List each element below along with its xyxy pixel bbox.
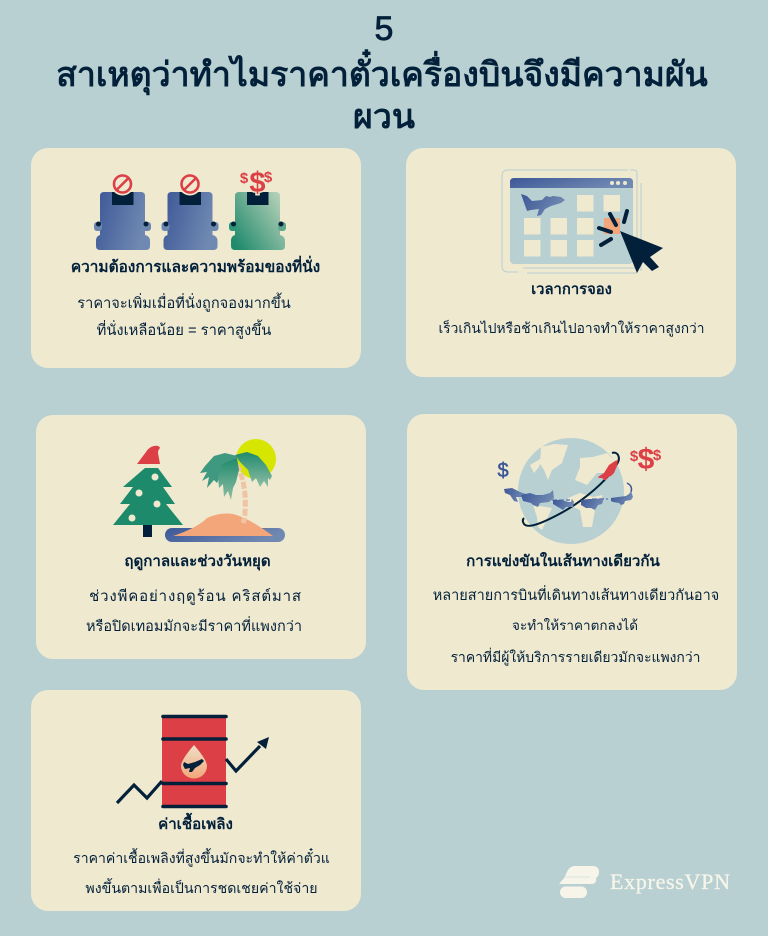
heading: การแข่งขันในเส้นทางเดียวกัน (466, 553, 660, 570)
body text: ช่วงพีคอย่างฤดูร้อน คริสต์มาส (89, 588, 302, 605)
panel: competition on the same route (407, 414, 737, 690)
icon: globe with planes and flight path: $ (630, 448, 639, 465)
body text: จะทำให้ราคาตกลงได้ (512, 618, 638, 633)
panel: booking time (406, 148, 736, 377)
body text: เร็วเกินไปหรือช้าเกินไปอาจทำให้ราคาสูงกว่า (438, 321, 705, 336)
body text: ราคาที่มีผู้ให้บริการรายเดียวมักจะแพงกว่า (451, 649, 700, 665)
body text (73, 848, 330, 896)
logo: ExpressVPN (559, 866, 731, 898)
body text: ที่นั่งเหลือน้อย = ราคาสูงขึ้น (97, 323, 271, 339)
heading: เวลาการจอง (531, 282, 612, 298)
icon: globe with planes and flight path: $ (653, 447, 662, 464)
body text: หรือปิดเทอมมักจะมีราคาที่แพงกว่า (86, 619, 302, 635)
panel: seasons and holidays (36, 415, 366, 659)
body text: ราคาจะเพิ่มเมื่อที่นั่งถูกจองมากขึ้น (77, 296, 291, 312)
title: ผวน (353, 98, 415, 136)
icon: three seats: $ (249, 167, 266, 199)
icon: globe with planes and flight path: $ (638, 443, 655, 476)
icon: oil barrel with rising arrow (116, 714, 269, 808)
body text (77, 292, 291, 339)
icon: three seats (94, 167, 286, 250)
body text: ราคาค่าเชื้อเพลิงที่สูงขึ้นมักจะทำให้ค่าตั๋วแ (73, 850, 330, 866)
title (56, 10, 708, 136)
title: สาเหตุว่าทำไมราคาตั๋วเครื่องบินจึงมีความผัน (56, 56, 708, 94)
icon: globe with planes and flight path: $ (497, 460, 509, 482)
body text (86, 588, 302, 635)
icon: three seats: $ (240, 170, 249, 187)
title: 5 (375, 10, 393, 48)
icon: christmas tree and palm island (113, 439, 285, 542)
body text (433, 585, 719, 666)
wordmark: ExpressVPN (610, 869, 731, 894)
heading: ความต้องการและความพร้อมของที่นั่ง (71, 259, 320, 276)
body text: พงขึ้นตามเพื่อเป็นการชดเชยค่าใช้จ่าย (85, 880, 318, 896)
heading: ค่าเชื้อเพลิง (158, 816, 233, 833)
icon: ExpressVPN mark (559, 866, 599, 898)
icon: calendar with cursor (502, 170, 663, 274)
panel: seat demand and availability (31, 148, 361, 368)
icon: three seats: $ (264, 169, 273, 186)
icon: globe with planes and flight path (497, 438, 662, 544)
panel: fuel cost (31, 690, 361, 911)
heading: ฤดูกาลและช่วงวันหยุด (124, 553, 271, 570)
body text: หลายสายการบินที่เดินทางเส้นทางเดียวกันอาจ (433, 588, 719, 604)
